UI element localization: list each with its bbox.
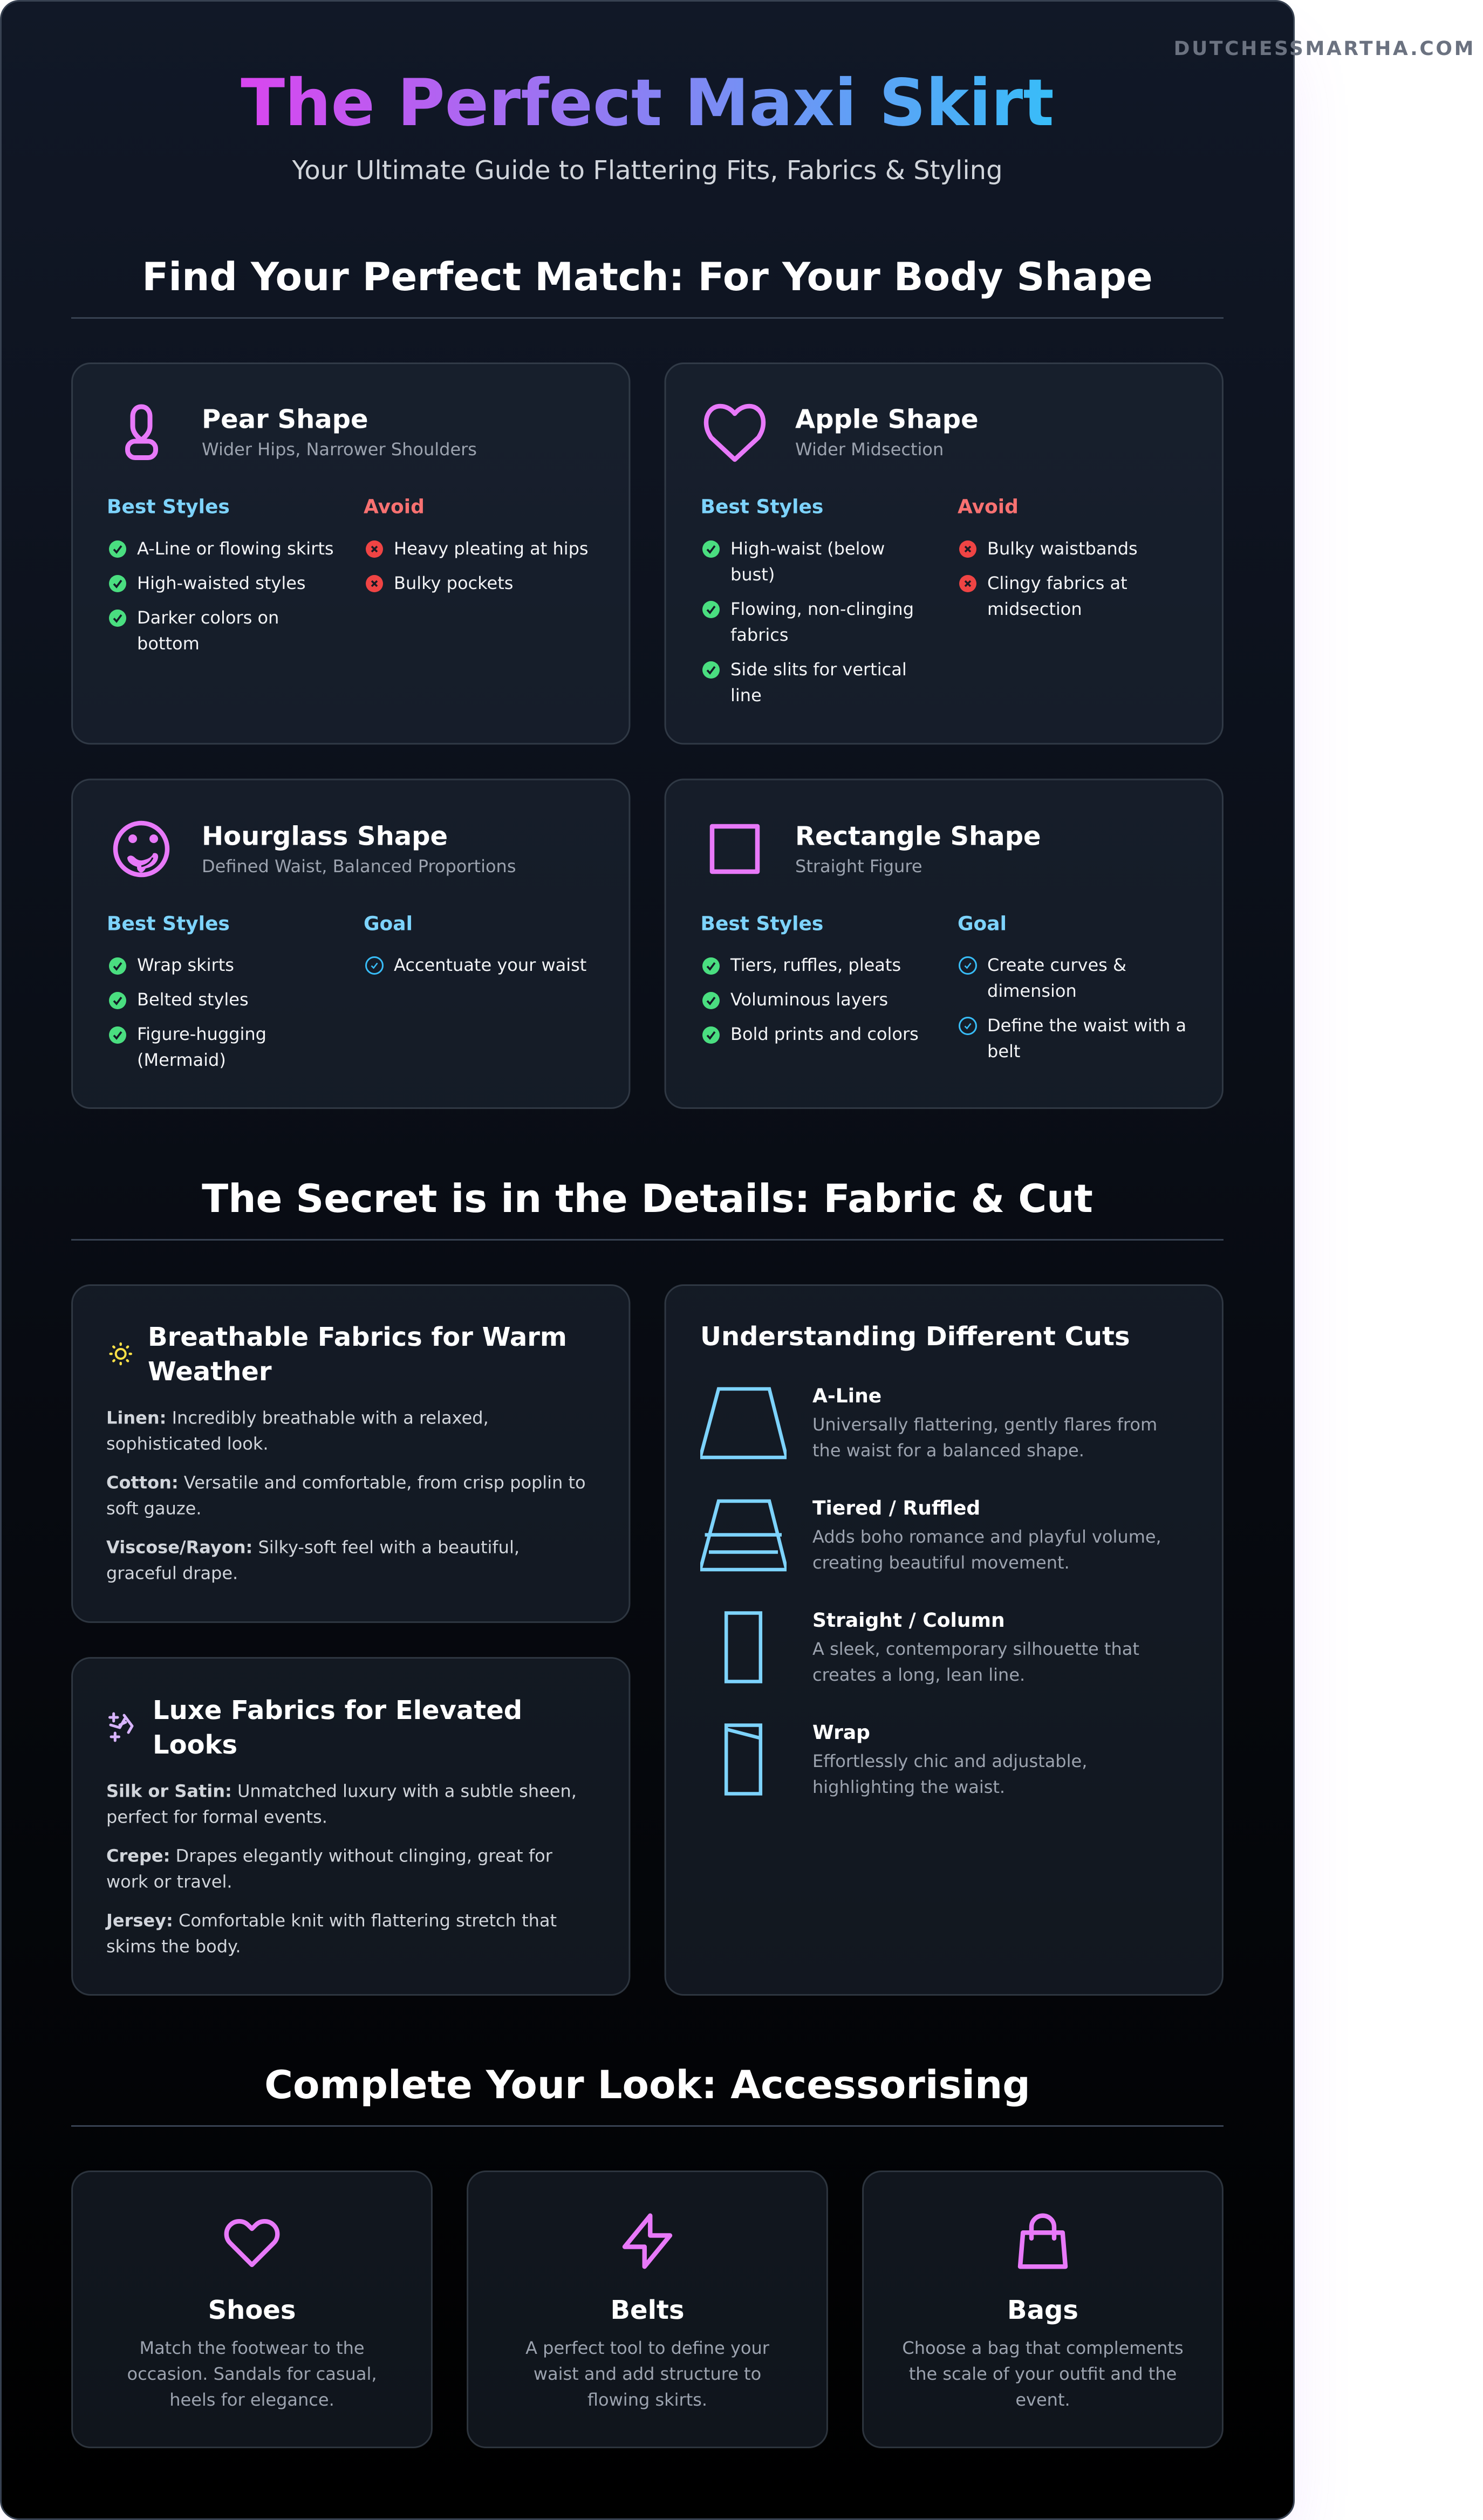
panel: pear shape: Best Styles [107, 496, 230, 518]
heading: accessorising section [71, 2062, 1224, 2127]
best styles list: line [730, 685, 762, 706]
fabric descriptions: skims the body. [106, 1936, 241, 1957]
panel: shoes [72, 2172, 432, 2448]
panel: belts [467, 2172, 828, 2448]
subtitle: Your Ultimate Guide to Flattering Fits, Fabrics & Styling [291, 155, 1003, 186]
panel: breathable fabrics [72, 1285, 630, 1622]
best styles list: Darker colors on [137, 607, 279, 628]
cut: tiered ruffled: creating beautiful movement. [812, 1552, 1070, 1573]
best styles list: High-waisted styles [137, 573, 306, 593]
panel: understanding cuts: Understanding Different Cuts [700, 1321, 1130, 1352]
heading: accessorising section: Complete Your Look: Accessorising [264, 2062, 1030, 2107]
best styles list: High-waist (below [730, 538, 885, 559]
icon: sparkles wand [110, 1714, 132, 1741]
panel: apple shape: Wider Midsection [795, 439, 944, 460]
best styles list: bottom [137, 633, 200, 654]
panel: apple shape: Best Styles [700, 496, 823, 518]
cut: tiered ruffled: Tiered / Ruffled [812, 1497, 980, 1519]
panel: belts: Belts [610, 2295, 685, 2325]
best styles list: Tiers, ruffles, pleats [730, 955, 901, 975]
panel: rectangle shape: Goal [958, 913, 1007, 935]
best styles list [702, 955, 919, 1044]
cut: a-line: Universally flattering, gently flares from [812, 1414, 1157, 1435]
panel: bags: Bags [1007, 2295, 1078, 2325]
icon: pear [127, 407, 155, 457]
description: flowing skirts. [587, 2389, 707, 2410]
cut: straight column: A sleek, contemporary silhouette that [812, 1639, 1139, 1659]
panel: pear shape: Wider Hips, Narrower Shoulders [202, 439, 477, 460]
cut: straight column [726, 1610, 1139, 1685]
best styles list: Side slits for vertical [730, 659, 907, 680]
description: waist and add structure to [534, 2364, 761, 2384]
best styles list [109, 538, 334, 654]
panel: bags [863, 2172, 1222, 2448]
panel: rectangle shape [665, 779, 1222, 1108]
best styles list: Belted styles [137, 989, 249, 1010]
fabric descriptions: graceful drape. [106, 1563, 238, 1584]
panel: pear shape [72, 364, 630, 744]
panel: rectangle shape: Rectangle Shape [795, 821, 1041, 851]
best styles list: (Mermaid) [137, 1050, 226, 1070]
fabric descriptions: Crepe: Drapes elegantly without clinging, great for [106, 1846, 553, 1866]
fabric descriptions: sophisticated look. [106, 1434, 269, 1454]
icon: heart [706, 406, 763, 460]
best styles list: bust) [730, 564, 775, 585]
best styles list: A-Line or flowing skirts [137, 538, 334, 559]
panel: pear shape: Pear Shape [202, 405, 368, 435]
panel: apple shape: Apple Shape [795, 405, 979, 435]
description [902, 2338, 1184, 2410]
best styles list: fabrics [730, 625, 789, 645]
panel: apple shape [665, 364, 1222, 744]
fabric descriptions: Viscose/Rayon: Silky-soft feel with a beautiful, [106, 1537, 520, 1558]
cut: tiered ruffled [700, 1497, 1161, 1573]
fabric descriptions: Silk or Satin: Unmatched luxury with a subtle sheen, [106, 1781, 577, 1802]
fabric descriptions: Linen: Incredibly breathable with a relaxed, [106, 1408, 489, 1428]
cut: tiered ruffled: Adds boho romance and playful volume, [812, 1526, 1161, 1547]
heading: body shape section [71, 254, 1224, 319]
panel: pear shape: Avoid [364, 496, 425, 518]
best styles list: Bold prints and colors [730, 1024, 919, 1044]
cut: a-line: the waist for a balanced shape. [812, 1440, 1084, 1461]
icon: rectangle [712, 826, 757, 872]
best styles list: Wrap skirts [137, 955, 234, 975]
description [127, 2338, 377, 2410]
watermark: DUTCHESSMARTHA.COM [1174, 38, 1475, 60]
icon: sun [111, 1344, 131, 1364]
cut: straight column: Straight / Column [812, 1610, 1005, 1632]
cut: wrap: highlighting the waist. [812, 1777, 1005, 1797]
heading: fabric and cut section [71, 1176, 1224, 1241]
description: A perfect tool to define your [525, 2338, 770, 2358]
avoid list: midsection [987, 599, 1082, 619]
cut: wrap [726, 1722, 1087, 1797]
description: the scale of your outfit and the [909, 2364, 1177, 2384]
cut: straight column: creates a long, lean line. [812, 1665, 1025, 1685]
panel: hourglass shape: Best Styles [107, 913, 230, 935]
panel: rectangle shape: Straight Figure [795, 856, 922, 876]
avoid list: Clingy fabrics at [987, 573, 1127, 593]
description: heels for elegance. [169, 2389, 334, 2410]
panel: rectangle shape: Best Styles [700, 913, 823, 935]
fabric descriptions: Cotton: Versatile and comfortable, from crisp poplin to [106, 1473, 586, 1493]
icon: shopping bag [1017, 2214, 1068, 2269]
panel: apple shape: Avoid [958, 496, 1019, 518]
best styles list: Figure-hugging [137, 1024, 266, 1044]
cut: wrap: Effortlessly chic and adjustable, [812, 1751, 1087, 1771]
avoid list [959, 538, 1138, 619]
goal list: Define the waist with a [987, 1015, 1186, 1036]
panel: luxe fabrics [72, 1658, 630, 1995]
goal list: Accentuate your waist [394, 955, 586, 975]
fabric descriptions: work or travel. [106, 1872, 233, 1892]
heading: body shape section: Find Your Perfect Match: For Your Body Shape [142, 254, 1153, 299]
panel: luxe fabrics: Luxe Fabrics for Elevated [153, 1695, 522, 1725]
panel: hourglass shape: Hourglass Shape [202, 821, 448, 851]
description [525, 2338, 770, 2410]
best styles list [109, 955, 266, 1070]
avoid list [366, 538, 589, 593]
icon: lightning bolt [623, 2214, 672, 2269]
panel: breathable fabrics: Breathable Fabrics for Warm [148, 1322, 567, 1352]
description: Choose a bag that complements [902, 2338, 1184, 2358]
fabric descriptions [105, 1781, 577, 1957]
goal list: dimension [987, 981, 1077, 1001]
best styles list: Voluminous layers [730, 989, 888, 1010]
avoid list: Heavy pleating at hips [394, 538, 589, 559]
description: Match the footwear to the [139, 2338, 365, 2358]
panel: hourglass shape: Defined Waist, Balanced Proportions [202, 856, 516, 876]
cut: a-line [700, 1385, 1157, 1461]
panel: hourglass shape [72, 779, 630, 1108]
heading: fabric and cut section: The Secret is in the Details: Fabric & Cut [202, 1176, 1093, 1221]
description: event. [1015, 2389, 1070, 2410]
icon: heart [224, 2219, 279, 2268]
panel: breathable fabrics: Weather [148, 1357, 272, 1387]
fabric descriptions: perfect for formal events. [106, 1807, 327, 1827]
fabric descriptions [106, 1408, 586, 1584]
icon: smiling face [115, 823, 167, 875]
title: The Perfect Maxi Skirt [241, 66, 1054, 141]
fabric descriptions: Jersey: Comfortable knit with flattering stretch that [105, 1910, 557, 1931]
panel: understanding cuts [665, 1285, 1222, 1995]
best styles list [702, 538, 914, 706]
panel: hourglass shape: Goal [364, 913, 413, 935]
goal list: Create curves & [987, 955, 1126, 975]
description: occasion. Sandals for casual, [127, 2364, 377, 2384]
cut: a-line: A-Line [812, 1385, 881, 1407]
goal list: belt [987, 1041, 1020, 1062]
cut: wrap: Wrap [812, 1722, 870, 1744]
panel: luxe fabrics: Looks [153, 1730, 237, 1760]
fabric descriptions: soft gauze. [106, 1498, 202, 1519]
best styles list: Flowing, non-clinging [730, 599, 914, 619]
panel: shoes: Shoes [208, 2295, 296, 2325]
avoid list: Bulky waistbands [987, 538, 1138, 559]
avoid list: Bulky pockets [394, 573, 513, 593]
goal list [959, 955, 1186, 1062]
